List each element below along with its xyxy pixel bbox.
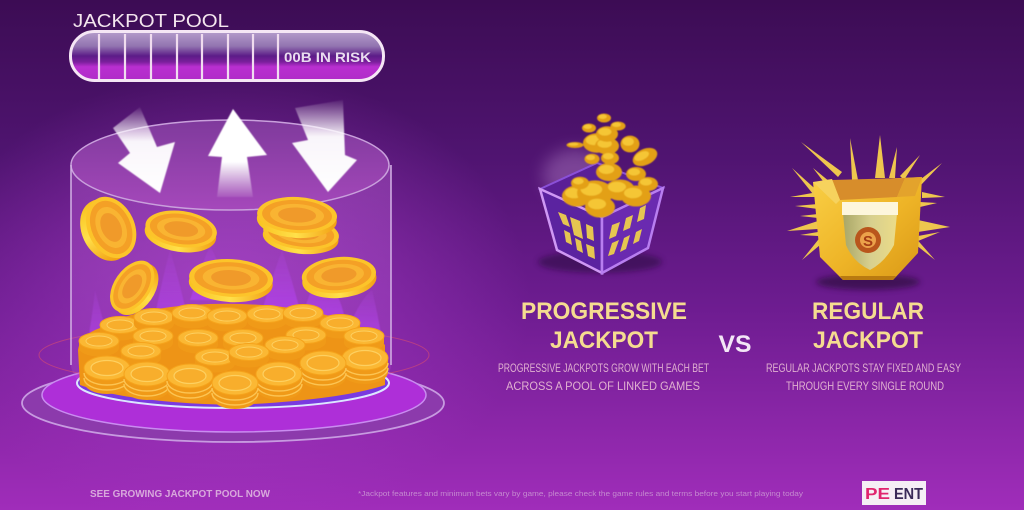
regular description: REGULAR JACKPOTS STAY FIXED AND EASY <box>766 361 961 375</box>
footer disclaimer: *Jackpot features and minimum bets vary by game, please check the game rules and terms before you start playing today <box>358 489 803 498</box>
floating coins <box>71 189 378 323</box>
arrow: centre pointing up <box>208 109 267 197</box>
purple flames <box>86 245 382 350</box>
footer left text: SEE GROWING JACKPOT POOL NOW <box>90 488 270 500</box>
progressive description: PROGRESSIVE JACKPOTS GROW WITH EACH BET <box>498 361 709 375</box>
heading: regular jackpot: JACKPOT <box>813 327 923 354</box>
heading: regular jackpot <box>812 298 924 354</box>
glass cylinder <box>71 120 391 383</box>
icon: purple basket of gold coins <box>538 113 663 273</box>
icon: golden box with shield <box>787 135 950 290</box>
logo badge: ENT <box>894 486 923 503</box>
heading: progressive jackpot <box>521 298 687 354</box>
jackpot pool progress bar <box>70 32 384 80</box>
heading: regular jackpot: REGULAR <box>812 298 924 325</box>
platform base <box>22 325 444 442</box>
vs label: VS <box>718 331 752 358</box>
coin pile <box>78 304 388 409</box>
basket coins <box>562 113 660 218</box>
arrow: right pointing down <box>292 100 357 192</box>
logo badge: PE <box>865 486 890 503</box>
regular description: THROUGH EVERY SINGLE ROUND <box>786 379 944 393</box>
shield medallion <box>855 227 881 253</box>
burst rays <box>787 135 950 260</box>
arrow: left pointing down <box>113 107 175 193</box>
shield medallion: S <box>863 233 873 250</box>
box body <box>813 177 922 280</box>
regular description <box>766 361 961 393</box>
jackpot pool title: JACKPOT POOL <box>73 11 229 31</box>
shield emblem <box>842 203 898 270</box>
logo badge <box>862 481 926 505</box>
heading: progressive jackpot: JACKPOT <box>550 327 658 354</box>
basket windows <box>558 205 646 259</box>
progressive description <box>498 361 709 393</box>
progressive description: ACROSS A POOL OF LINKED GAMES <box>506 379 700 393</box>
heading: progressive jackpot: PROGRESSIVE <box>521 298 687 325</box>
bar value: 00B IN RISK <box>284 49 371 65</box>
bar segment dividers <box>99 34 278 79</box>
